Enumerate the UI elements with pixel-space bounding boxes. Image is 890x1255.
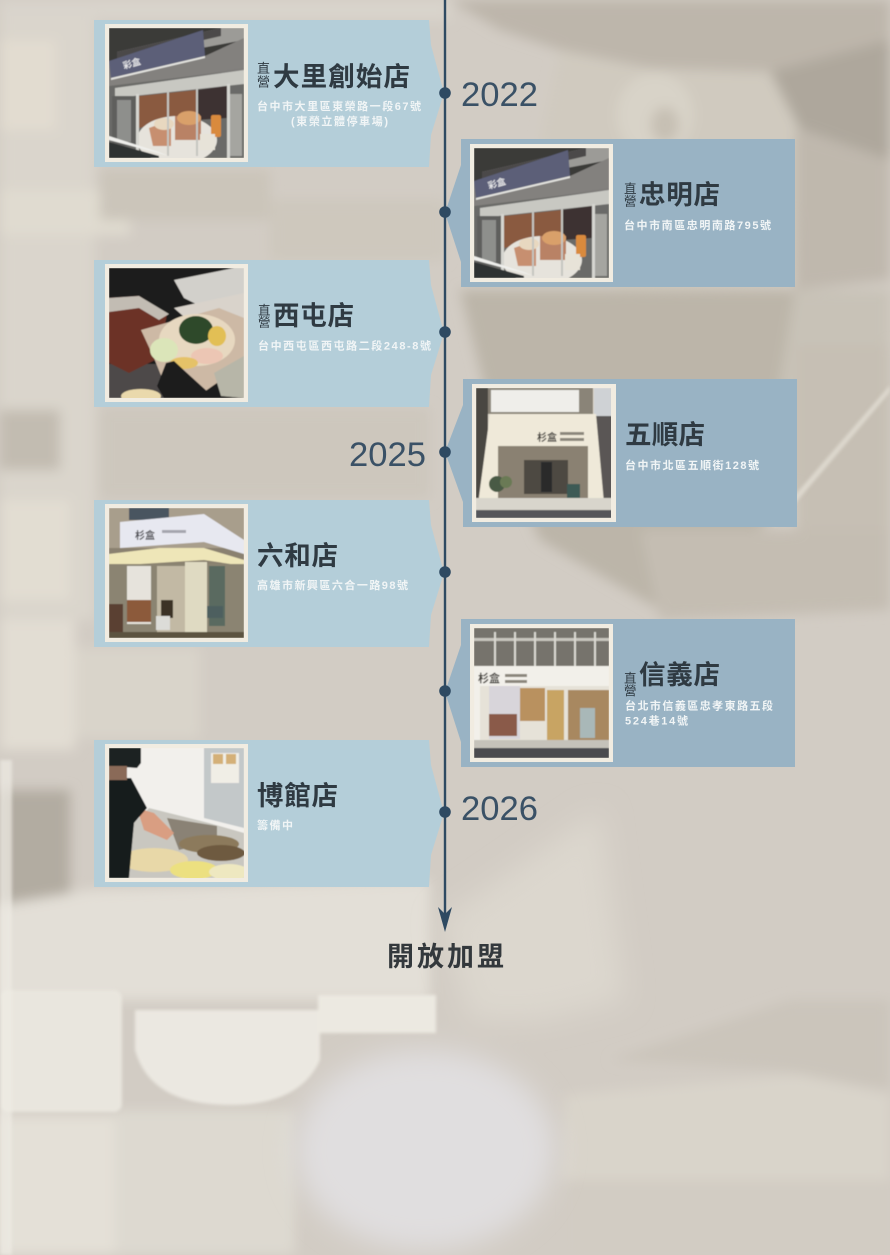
address: 六和: 高雄市新興區六合一路98號 xyxy=(257,578,408,592)
address: 籌備中: 籌備中 xyxy=(257,818,293,832)
address: 忠明: 台中市南區忠明南路795號 xyxy=(624,218,771,232)
soft glove and arm xyxy=(295,810,625,1250)
store card: 信義店 xyxy=(445,619,795,767)
heading: 直營 西屯店: 西屯店 xyxy=(273,301,354,331)
heading: 直營 西屯店: 營 xyxy=(258,316,271,330)
photo: 六和 storefront xyxy=(105,504,248,642)
heading: 直營 信義店: 直 xyxy=(624,672,637,686)
heading: 直營 大里創始店: 大里創始店 xyxy=(273,62,410,92)
photo: 博館 kitchen xyxy=(105,744,249,882)
heading: 五順店: 五順店 xyxy=(625,420,705,450)
closing label: 開放加盟: 開放加盟 xyxy=(387,942,504,972)
store card: 忠明店 xyxy=(445,139,795,287)
heading: 博館店: 博館店 xyxy=(257,781,338,811)
heading: 直營 信義店 xyxy=(624,660,720,698)
heading: 直營 西屯店: 直 xyxy=(258,304,271,318)
year: 2022: 2022 xyxy=(461,76,538,114)
heading: 直營 忠明店: 直 xyxy=(624,182,637,196)
year: 2026: 2026 xyxy=(461,790,538,828)
address: 西屯: 台中西屯區西屯路二段248-8號 xyxy=(258,338,431,352)
store card: 博館店 xyxy=(94,740,444,887)
address: 大里: (東榮立體停車場) xyxy=(291,114,388,128)
photo: 西屯 food preparation xyxy=(105,264,248,403)
photo: 六和 storefront: 杉盒 xyxy=(135,529,155,542)
store card: 大里創始店 xyxy=(94,20,444,167)
year: 2025: 2025 xyxy=(349,436,426,474)
photo: 五順 storefront xyxy=(472,384,616,522)
store card: 五順店 xyxy=(445,379,797,527)
heading: 直營 信義店: 營 xyxy=(624,684,637,698)
store card: 六和店 xyxy=(94,500,444,647)
photo: 信義 storefront: 杉盒 xyxy=(478,671,500,685)
address: 五順: 台中市北區五順街128號 xyxy=(625,458,759,472)
timeline axis with arrow xyxy=(438,0,452,932)
timeline dots xyxy=(439,87,451,818)
address: 大里: 台中市大里區東榮路一段67號 xyxy=(257,99,421,113)
address: 大里 xyxy=(257,99,421,128)
address: 信義 xyxy=(625,698,773,728)
heading: 直營 大里創始店: 營 xyxy=(257,74,270,90)
photo: 大里 storefront xyxy=(105,24,248,164)
store card: 西屯店 xyxy=(94,260,444,407)
address: 信義: 台北市信義區忠孝東路五段 xyxy=(625,698,773,712)
photo: 五順 storefront: 杉盒 xyxy=(537,431,557,444)
heading: 直營 忠明店: 忠明店 xyxy=(639,180,720,210)
photo: 忠明 storefront xyxy=(470,144,613,284)
heading: 直營 忠明店: 營 xyxy=(624,194,637,208)
heading: 直營 大里創始店: 直 xyxy=(257,61,270,76)
heading: 直營 信義店: 信義店 xyxy=(639,660,720,690)
heading: 六和店: 六和店 xyxy=(257,541,338,571)
address: 信義: 524巷14號 xyxy=(625,714,688,728)
photo: 信義 storefront xyxy=(470,624,613,762)
